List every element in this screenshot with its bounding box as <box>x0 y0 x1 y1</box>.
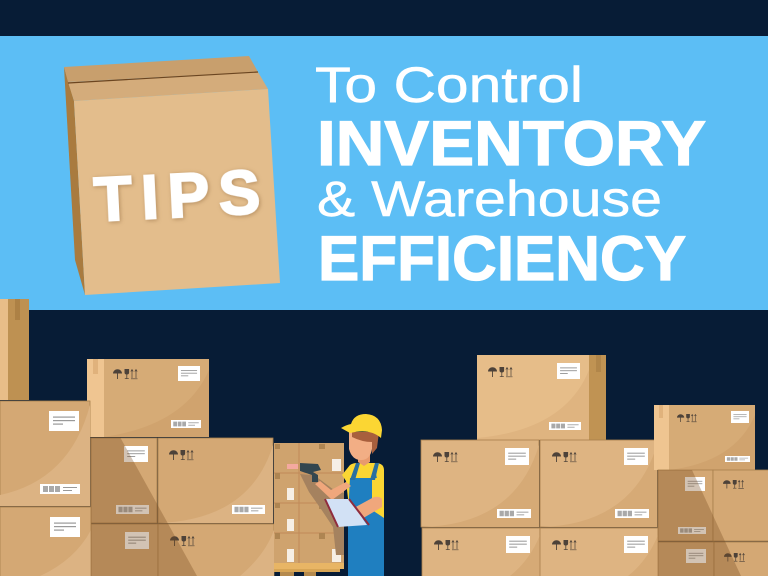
overall straps <box>350 463 379 480</box>
right box stack <box>421 355 768 576</box>
helmet <box>341 414 382 438</box>
cast shadow <box>658 470 741 576</box>
title: INVENTORY <box>317 109 706 179</box>
tips cardboard box <box>64 56 280 295</box>
box: right middle <box>158 438 273 523</box>
box: far right middle <box>713 470 768 541</box>
left arm <box>315 481 351 500</box>
pallet <box>274 563 344 576</box>
box: shaded bottom <box>91 524 158 576</box>
pallet stack behind worker <box>274 443 344 576</box>
box: right bottom <box>158 524 274 576</box>
cast shadow <box>91 437 197 576</box>
box: shaded bottom <box>658 542 714 576</box>
title <box>315 57 706 294</box>
left box stack <box>0 299 274 576</box>
worker <box>287 414 384 576</box>
box: left bottom <box>0 507 91 576</box>
right arm <box>352 497 382 520</box>
box: shaded middle <box>91 438 157 523</box>
box: row 2 left <box>421 440 539 527</box>
clipboard <box>325 499 369 527</box>
box: shaded middle <box>658 470 713 541</box>
box: upper <box>87 359 209 437</box>
box: row 3 left <box>422 528 540 576</box>
neck and face <box>358 452 370 466</box>
tips label: TIPS <box>92 158 262 235</box>
title: To Control <box>315 57 583 113</box>
scanner <box>287 463 321 482</box>
box: far right bottom <box>714 542 768 576</box>
box: row 3 right <box>540 528 658 576</box>
box: far left top <box>0 299 29 400</box>
box: row 2 right <box>540 440 657 527</box>
blue title band <box>0 36 768 310</box>
box: top <box>477 355 606 440</box>
box: upper right <box>654 405 755 470</box>
shirt <box>342 463 384 518</box>
title: EFFICIENCY <box>318 224 686 294</box>
box: left middle <box>0 401 90 506</box>
overalls <box>348 474 384 576</box>
title: & Warehouse <box>317 171 662 227</box>
